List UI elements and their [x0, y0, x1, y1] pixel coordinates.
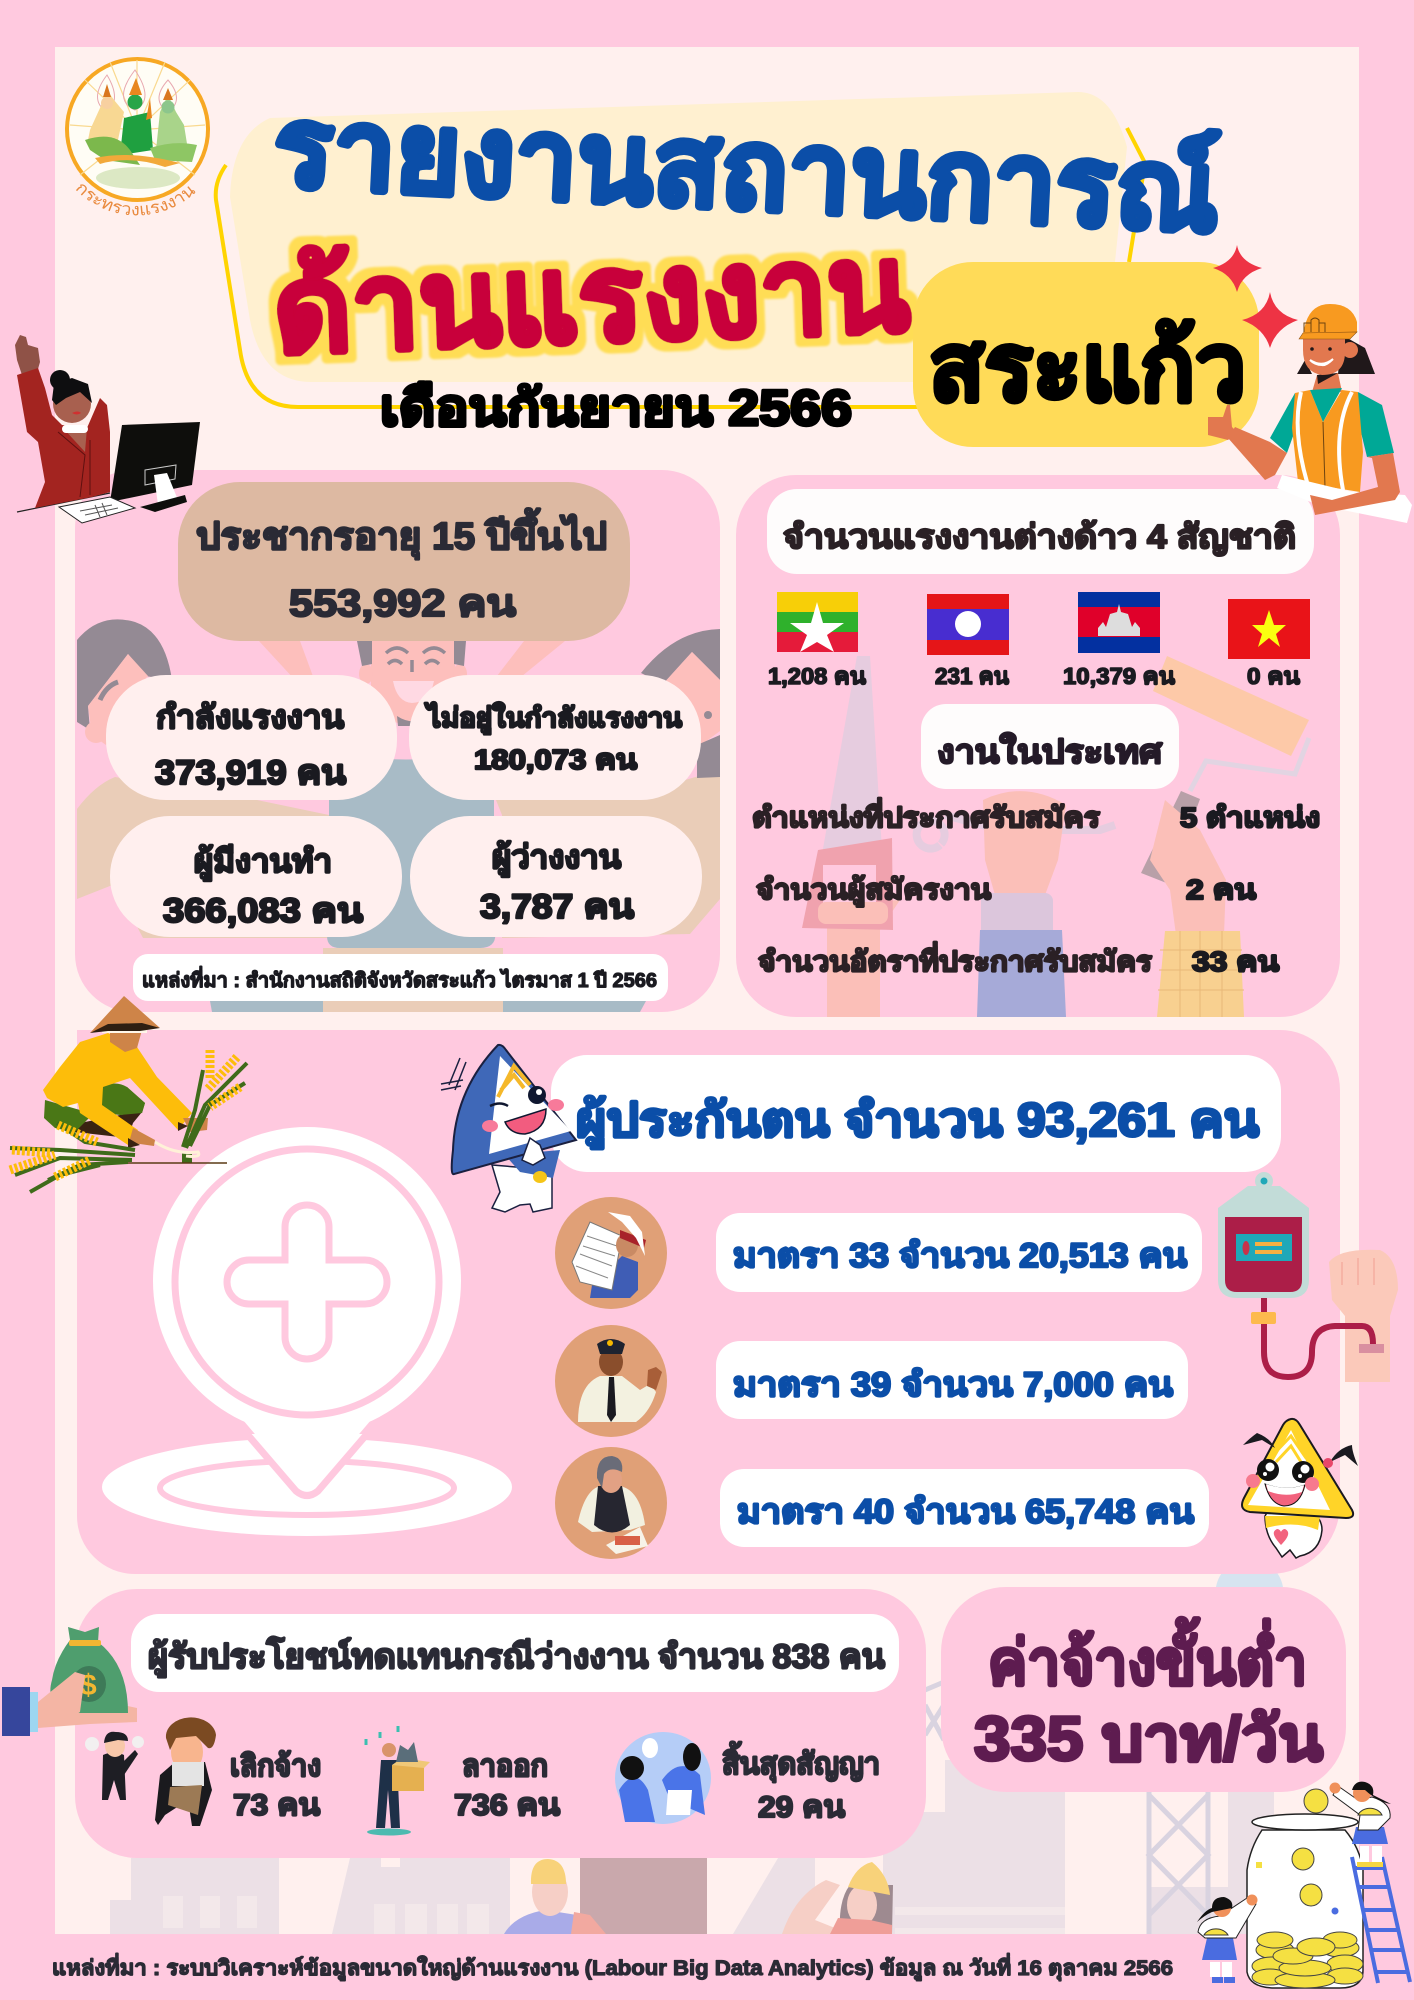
title backdrop and outline — [216, 92, 1145, 407]
logo: Ministry of Labour seal — [65, 57, 210, 216]
panel: minimum wage: 335 บาท/วัน — [974, 1705, 1323, 1774]
pill: employed: ผู้มีงานทำ — [194, 843, 332, 882]
icon: angry boss and dismissed employee — [85, 1717, 216, 1826]
foreign worker counts: 231 คน — [935, 663, 1009, 689]
icon: chef cutting meat — [555, 1447, 667, 1559]
heading pill: domestic jobs: งานในประเทศ — [937, 732, 1163, 770]
job statistics rows: จำนวนผู้สมัครงาน — [756, 874, 991, 907]
text: resigned: 736 คน — [454, 1789, 561, 1822]
job statistics rows: 5 ตำแหน่ง — [1180, 802, 1320, 833]
icon: coin jar with two girls and ladder — [1197, 1782, 1410, 1988]
flag: Myanmar — [777, 592, 858, 652]
heading pill: insured persons total — [551, 1055, 1281, 1172]
province badge — [913, 262, 1259, 447]
pill: section 39 — [716, 1341, 1188, 1419]
panel: foreign workers and domestic jobs — [736, 475, 1340, 1017]
province badge: สระแก้ว — [929, 315, 1246, 420]
text: contract ended: สิ้นสุดสัญญา — [722, 1741, 880, 1783]
icon: hand holding money bag: $ — [80, 1669, 97, 1702]
flag: Laos — [927, 594, 1009, 655]
heading pill: population aged 15+ — [178, 482, 630, 641]
panel: minimum wage — [941, 1587, 1346, 1792]
text: contract ended: 29 คน — [758, 1791, 846, 1824]
icon: hand holding money bag — [2, 1627, 137, 1736]
icon: construction worker giving thumbs up — [1208, 304, 1412, 523]
title line 1: รายงานสถานการณ์ — [271, 84, 1222, 255]
panel: unemployment benefit recipients — [75, 1589, 926, 1858]
heading pill: foreign workers: จำนวนแรงงานต่างด้าว 4 สัญชาติ — [783, 518, 1296, 556]
icon: security guard — [555, 1325, 667, 1437]
heading pill: benefit recipients — [131, 1614, 899, 1692]
text: termination: 73 คน — [233, 1789, 321, 1822]
text: contract ended — [722, 1741, 880, 1824]
pill: not in labour force: 180,073 คน — [474, 744, 637, 775]
pill: employed — [110, 816, 402, 937]
icon: red sparkles — [1213, 245, 1298, 348]
pill: not in labour force — [409, 675, 701, 800]
source note: แหล่งที่มา : สำนักงานสถิติจังหวัดสระแก้ว ไตรมาส 1 ปี 2566 — [142, 965, 657, 992]
job statistics rows: 33 คน — [1192, 946, 1279, 977]
panel: insured persons — [77, 1030, 1398, 1574]
pill: employed: 366,083 คน — [163, 892, 363, 930]
subtitle: month: เดือนกันยายน 2566 — [380, 380, 852, 436]
text: termination: เลิกจ้าง — [230, 1750, 321, 1783]
foreign worker counts: 0 คน — [1247, 663, 1300, 689]
job statistics rows: 2 คน — [1186, 874, 1256, 905]
panel: population — [75, 470, 720, 1012]
raised hands with tools background — [802, 656, 1309, 1017]
pill: unemployed — [410, 816, 702, 937]
text: termination — [230, 1750, 321, 1822]
icon: resigning man with box — [366, 1726, 430, 1836]
foreign worker counts: 10,379 คน — [1063, 663, 1175, 689]
icon: location pin with medical cross — [102, 1127, 512, 1536]
pill: labour force — [106, 675, 397, 800]
icon: two people discussing contract — [615, 1732, 711, 1824]
job statistics rows: จำนวนอัตราที่ประกาศรับสมัคร — [758, 941, 1152, 977]
pill: not in labour force: ไม่อยู่ในกำลังแรงงาน — [424, 702, 683, 735]
heading pill: benefit recipients: ผู้รับประโยชน์ทดแทนกรณีว่างงาน จำนวน 838 คน — [148, 1636, 885, 1678]
flag: Vietnam — [1228, 599, 1310, 659]
pill: section 40: มาตรา 40 จำนวน 65,748 คน — [737, 1493, 1194, 1531]
foreign worker counts — [768, 663, 1300, 689]
icon: blue mascot — [441, 1045, 576, 1212]
pill: unemployed: ผู้ว่างงาน — [492, 839, 621, 878]
background factory illustration — [110, 1559, 1283, 1934]
logo: Ministry of Labour seal: กระทรวงแรงงาน — [76, 184, 196, 216]
icon: farmer harvesting rice — [10, 996, 247, 1192]
icon: woman in red suit at computer — [15, 335, 200, 523]
heading pill: population aged 15+: 553,992 คน — [289, 583, 516, 625]
icon: blood bag drip on arm — [1218, 1172, 1398, 1382]
text: resigned — [454, 1750, 561, 1822]
heading pill: insured persons total: ผู้ประกันตน จำนวน 93,261 คน — [576, 1093, 1259, 1150]
footer source line: แหล่งที่มา : ระบบวิเคราะห์ข้อมูลขนาดใหญ่ด้านแรงงาน (Labour Big Data Analytics) ข้อมูล ณ วันที่ 16 ตุลาคม 2566 — [52, 1952, 1173, 1982]
text: resigned: ลาออก — [462, 1750, 548, 1783]
people background illustration — [77, 619, 720, 1012]
pill: section 39: มาตรา 39 จำนวน 7,000 คน — [733, 1366, 1173, 1404]
job statistics rows: ตำแหน่งที่ประกาศรับสมัคร — [752, 797, 1100, 833]
pill: labour force: กำลังแรงงาน — [156, 699, 344, 735]
flag: Cambodia — [1078, 592, 1160, 653]
pill: unemployed: 3,787 คน — [480, 888, 634, 926]
icon: worker carrying papers — [555, 1197, 667, 1309]
pill: section 33 — [716, 1213, 1202, 1292]
heading pill: foreign workers — [767, 489, 1314, 574]
heading pill: population aged 15+: ประชากรอายุ 15 ปีขึ้นไป — [196, 508, 607, 560]
job statistics rows — [752, 797, 1320, 977]
pill: section 40 — [720, 1469, 1209, 1547]
panel: minimum wage: ค่าจ้างขั้นต่ำ — [988, 1617, 1307, 1698]
heading pill: domestic jobs — [921, 704, 1179, 789]
pill: section 33: มาตรา 33 จำนวน 20,513 คน — [733, 1237, 1187, 1275]
title line 2: ด้านแรงงาน — [271, 220, 912, 378]
icon: yellow mascot — [1242, 1419, 1358, 1558]
pill: labour force: 373,919 คน — [155, 754, 346, 792]
foreign worker counts: 1,208 คน — [768, 663, 866, 689]
source note — [133, 954, 668, 1001]
